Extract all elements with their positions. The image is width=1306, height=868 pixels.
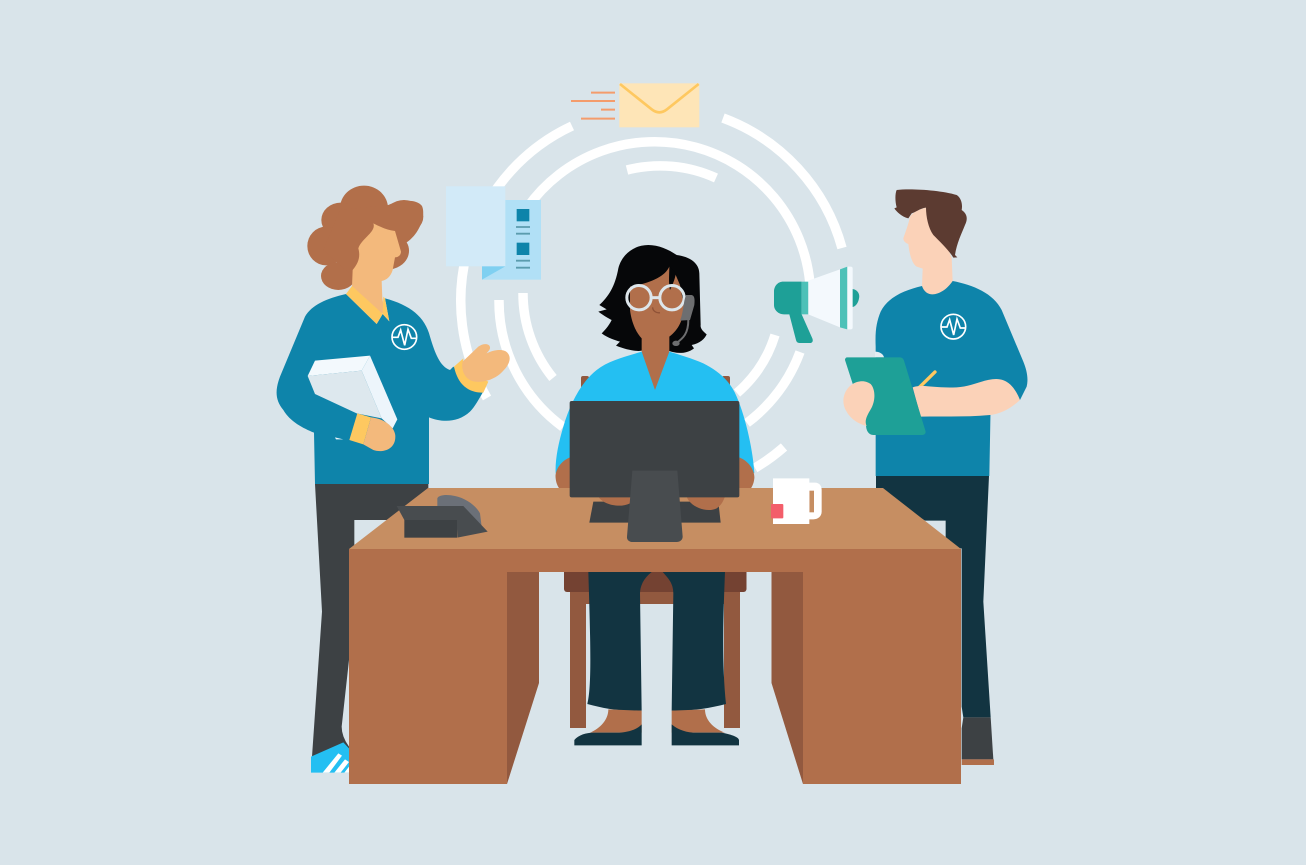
- person: left woman upper body: [277, 186, 510, 484]
- face: [352, 223, 401, 313]
- hand: [843, 381, 874, 426]
- desk: [349, 488, 961, 784]
- right cuff and hand: [454, 358, 488, 393]
- icon: mug: [771, 478, 822, 524]
- left cuff and hand: [349, 413, 371, 444]
- person: right man upper body: [843, 189, 1027, 476]
- hair: [598, 245, 707, 353]
- clipboard: [845, 357, 926, 435]
- forearm: [913, 379, 1020, 417]
- person: right man legs: [876, 476, 994, 765]
- logo: [392, 325, 417, 349]
- person: left woman legs: [311, 484, 428, 773]
- centre woman legs: [574, 572, 652, 745]
- sleeve sliver: [875, 352, 884, 357]
- icon: envelope: [571, 83, 699, 127]
- hair: [894, 189, 967, 258]
- icon: desk phone: [397, 495, 488, 538]
- hair strand: [669, 266, 676, 290]
- face: [903, 208, 953, 300]
- sweater: [277, 294, 483, 484]
- person: centre woman: [556, 245, 754, 498]
- arms: [556, 457, 754, 498]
- hair: [307, 186, 423, 290]
- pencil: [917, 372, 935, 390]
- signal rings: [461, 118, 842, 468]
- headset: [680, 295, 695, 321]
- t-shirt: [876, 281, 1027, 476]
- computer and keyboard: [570, 401, 739, 542]
- nose: [653, 307, 660, 313]
- glasses: [627, 285, 684, 310]
- shirt: [556, 352, 754, 473]
- face and neck: [630, 267, 684, 392]
- collar: [346, 286, 389, 324]
- icon: document speech bubble: [446, 186, 541, 280]
- icon: megaphone: [774, 267, 859, 343]
- logo: [941, 314, 966, 339]
- book: [308, 356, 370, 376]
- chair: [564, 376, 746, 728]
